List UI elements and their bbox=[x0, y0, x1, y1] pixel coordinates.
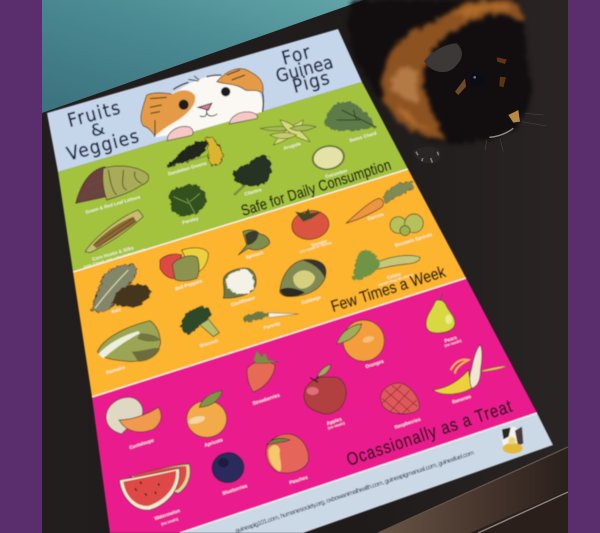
purple frame right bbox=[568, 0, 600, 533]
pig mouth highlight bbox=[489, 128, 513, 137]
icon: tomato bbox=[290, 208, 331, 242]
label: parsnip: Parsnip bbox=[263, 321, 281, 330]
icon: cabbage bbox=[280, 259, 326, 297]
label: blueberries: Blueberries bbox=[222, 483, 248, 496]
title: Fruits & Veggies: Veggies bbox=[65, 125, 142, 166]
icon: carrot bbox=[346, 181, 413, 223]
label: pears bbox=[444, 335, 462, 348]
title: For Guinea Pigs: Guinea bbox=[274, 52, 336, 88]
photo: real guinea pig bbox=[348, 0, 547, 163]
icon: arugula bbox=[260, 120, 316, 145]
label: apples: (no seeds) bbox=[327, 421, 345, 430]
icon: orange bbox=[337, 320, 384, 361]
icon: celery bbox=[352, 250, 420, 280]
icon: blueberry bbox=[210, 450, 246, 485]
icon: dandelion greens bbox=[167, 137, 223, 168]
heading: Few Times a Week: Few Times a Week bbox=[329, 263, 448, 316]
panel: few times a week orange band bbox=[73, 169, 466, 397]
white dividers bbox=[73, 169, 537, 533]
label: oranges: Oranges bbox=[365, 358, 385, 369]
icon: peach bbox=[266, 434, 309, 473]
label: apples: Apples bbox=[326, 416, 343, 426]
label: watermelon: (no seeds) bbox=[161, 517, 179, 526]
icon: romaine bbox=[97, 321, 161, 362]
icon: cauliflower bbox=[223, 268, 256, 298]
label: cauliflower: Cauliflower bbox=[230, 295, 256, 307]
label: watermelon: Watermelon bbox=[154, 508, 181, 521]
label: lettuce: Green & Red Leaf Lettuce bbox=[85, 194, 141, 215]
label: pears: (no seeds) bbox=[444, 339, 462, 348]
label: kale: Kale bbox=[111, 307, 122, 314]
pig eye bbox=[470, 72, 484, 86]
label: spinach: Spinach bbox=[245, 250, 264, 260]
teal wall bbox=[42, 0, 364, 113]
title: Fruits & Veggies bbox=[65, 97, 142, 166]
dresser edge bbox=[378, 447, 568, 533]
icon: corn husk bbox=[85, 210, 143, 253]
title: For Guinea Pigs bbox=[274, 41, 336, 98]
heading: Ocassionally as a Treat: Ocassionally as a Treat bbox=[344, 397, 515, 470]
title: Fruits & Veggies: & bbox=[88, 119, 107, 140]
label: apples bbox=[326, 416, 345, 430]
label: tomato: (no seeds or stems) bbox=[299, 241, 332, 254]
panel: header band bbox=[47, 29, 362, 172]
icon: spinach bbox=[238, 230, 270, 255]
icon: banana bbox=[433, 345, 507, 394]
icon: strawberry bbox=[247, 351, 278, 392]
panel: sources footer band bbox=[180, 413, 553, 533]
label: pears: Pears bbox=[444, 335, 458, 344]
poster bbox=[47, 29, 553, 533]
icon: bell peppers bbox=[160, 248, 208, 281]
icon: watermelon bbox=[119, 464, 190, 510]
label: celery: Celery bbox=[386, 271, 402, 280]
icon: cantaloupe bbox=[106, 397, 161, 434]
icon: pear bbox=[426, 293, 455, 333]
icon: apple bbox=[304, 364, 346, 414]
label: corn husks and silks: (only if fresh; only a few times a week) bbox=[83, 248, 145, 269]
label: carrots: Carrots bbox=[367, 212, 385, 221]
purple frame left bbox=[0, 0, 42, 533]
label: raspberries: Raspberries bbox=[394, 417, 421, 430]
pink band fruits bbox=[106, 293, 523, 526]
icon: parsnip bbox=[243, 312, 298, 323]
icon: parsley bbox=[169, 185, 206, 216]
label: cucumber: Cucumber bbox=[324, 168, 348, 179]
source credits: guineapig101.com, humanesociety.org, oxbowanimalhealth.com, guineapigmanual.com, guineafuel.com bbox=[234, 449, 475, 533]
label: romaine: Romaine bbox=[105, 365, 126, 375]
icon: brussels sprouts bbox=[390, 214, 423, 236]
icon: kale bbox=[92, 265, 151, 312]
label: peaches: Peaches bbox=[289, 474, 309, 485]
label: cabbage: Cabbage bbox=[301, 295, 322, 305]
label: apricots: Apricots bbox=[204, 437, 224, 448]
title: For Guinea Pigs: For bbox=[279, 41, 314, 70]
pig ear bbox=[424, 43, 462, 72]
panel: daily consumption green band bbox=[58, 82, 408, 272]
label: bananas: Bananas bbox=[452, 394, 472, 405]
icon: red leaf lettuce bbox=[76, 166, 149, 203]
label: arugula: Arugula bbox=[283, 141, 301, 151]
label: parsley: Parsley bbox=[182, 216, 199, 225]
pig cheek markings bbox=[455, 57, 520, 123]
icon: cilantro bbox=[233, 155, 272, 195]
label: swiss chard: Swiss Chard bbox=[349, 131, 377, 143]
pig whiskers bbox=[485, 113, 547, 152]
green band vegetables bbox=[76, 101, 377, 269]
icon: cucumber slice bbox=[310, 143, 347, 173]
title: Fruits & Veggies: Fruits bbox=[65, 97, 124, 132]
label: brussels sprouts: Brussels Sprouts bbox=[394, 232, 433, 248]
icon: footer guinea pig bbox=[502, 427, 523, 454]
icon: broccoli bbox=[181, 307, 219, 337]
label: cilantro: Cilantro bbox=[244, 187, 262, 197]
orange band vegetables bbox=[92, 181, 433, 375]
icon: raspberry bbox=[381, 383, 419, 414]
label: dandelion greens: Dandelion Greens bbox=[167, 161, 207, 176]
label: cantaloupe: Cantaloupe bbox=[129, 437, 155, 450]
mascot guinea pig bbox=[141, 69, 263, 141]
label: bell peppers: Bell Peppers bbox=[174, 278, 203, 291]
label: broccoli: Broccoli bbox=[199, 338, 219, 348]
pig paw bbox=[413, 147, 441, 163]
pig body bbox=[348, 0, 532, 144]
icon: swiss chard bbox=[324, 101, 377, 131]
title: For Guinea Pigs: Pigs bbox=[290, 67, 333, 98]
label: strawberries: Strawberries bbox=[252, 392, 281, 406]
label: corn husks and silks: Corn Husks & Silks bbox=[92, 245, 135, 262]
icon: apricot bbox=[187, 391, 227, 437]
label: celery: (small chop for chew) bbox=[378, 273, 413, 287]
label: tomato: Tomato bbox=[310, 238, 328, 248]
heading: Safe for Daily Consumption: Safe for Daily Consumption bbox=[239, 156, 393, 219]
panel: treat pink band bbox=[92, 278, 537, 533]
